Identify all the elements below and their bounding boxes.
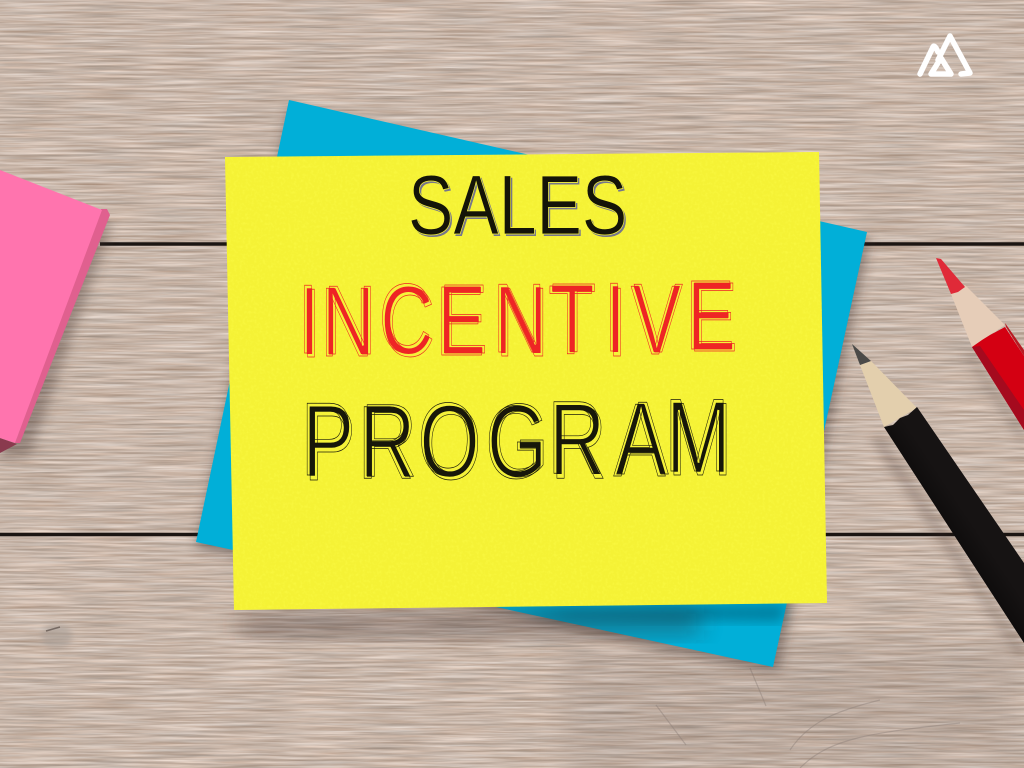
red pencil	[936, 258, 1024, 445]
yellow sticky note	[225, 152, 827, 636]
heading: INCENTIVE: INCENTIVE	[299, 263, 736, 376]
heading: SALES: SALES	[410, 159, 629, 254]
blue sticky note	[196, 100, 870, 672]
heading: SALES: SALES	[408, 157, 627, 252]
heading: INCENTIVE: INCENTIVE	[301, 264, 738, 378]
heading: PROGRAM: PROGRAM	[301, 378, 729, 501]
logo: white mountain mark	[920, 36, 970, 74]
pink sticky note pad	[0, 170, 112, 460]
black pencil	[852, 344, 1024, 662]
heading: INCENTIVE: INCENTIVE	[298, 262, 735, 377]
heading: PROGRAM: PROGRAM	[304, 381, 732, 503]
heading: PROGRAM: PROGRAM	[302, 380, 731, 500]
